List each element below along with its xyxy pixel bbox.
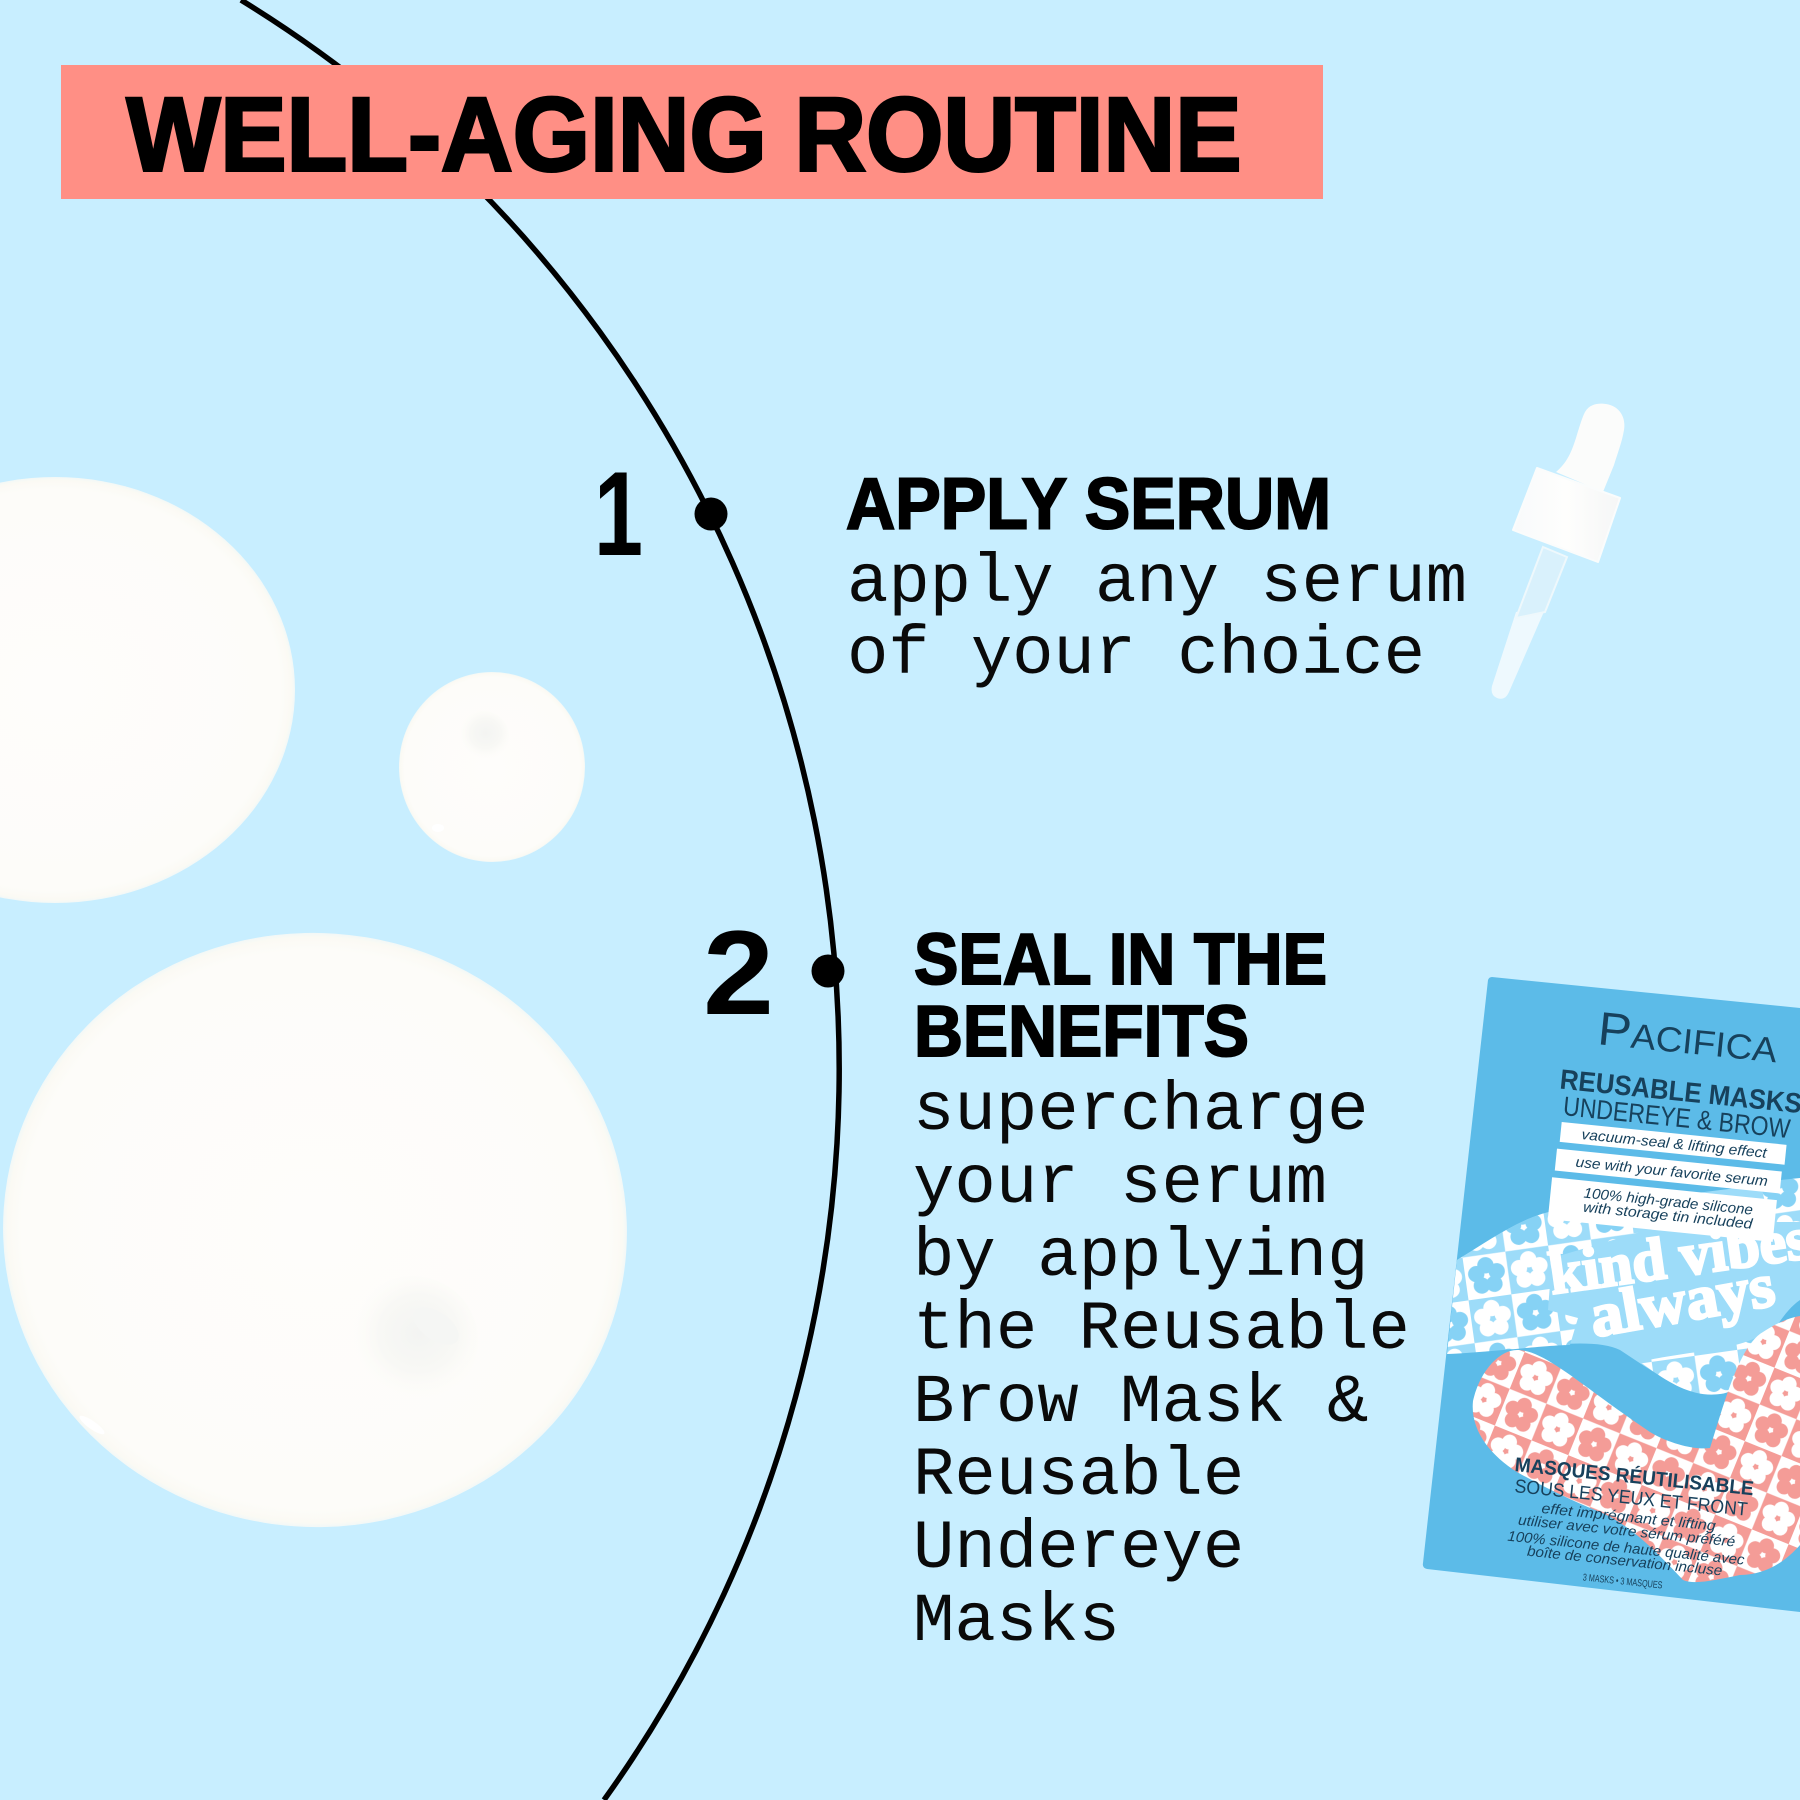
package text: PACIFICA — [1596, 1001, 1781, 1072]
timeline arc — [241, 0, 839, 1800]
package text: MASQUES RÉUTILISABLE — [1514, 1453, 1755, 1500]
step 1 body text — [847, 544, 1467, 694]
step 1 dot — [694, 498, 728, 530]
kind vibes always lettering: always — [1585, 1252, 1780, 1351]
package text: with storage tin included — [1582, 1200, 1754, 1233]
claim strip 2 — [1555, 1149, 1782, 1193]
step 2 number: 2 — [703, 906, 774, 1040]
package text: 100% high-grade silicone — [1583, 1186, 1754, 1219]
step 2 heading — [914, 920, 1327, 1072]
step 2 body text: by applying — [913, 1218, 1368, 1296]
pink floral undereye mask — [1473, 1316, 1800, 1582]
package text: 3 MASKS • 3 MASQUES — [1582, 1572, 1663, 1592]
claim strip 3 — [1548, 1177, 1777, 1242]
serum blobs — [0, 477, 647, 1548]
step 1 number: 1 — [594, 447, 643, 581]
step 2 body text: Reusable — [913, 1437, 1244, 1515]
package text: utiliser avec votre sérum préféré — [1517, 1513, 1736, 1551]
step 2 body text: supercharge — [913, 1072, 1368, 1150]
step 1 body text: apply any serum — [847, 544, 1467, 622]
step 2 body text: Undereye — [913, 1510, 1244, 1588]
icon: serum dropper — [1492, 404, 1624, 699]
blue floral band — [1447, 1178, 1800, 1395]
kind vibes always lettering — [1545, 1205, 1800, 1351]
step 2 body text: Brow Mask & — [913, 1364, 1368, 1442]
claim strip 1 — [1560, 1122, 1787, 1165]
step 2 heading: SEAL IN THE — [914, 920, 1327, 1000]
package text: boîte de conservation incluse — [1526, 1544, 1723, 1579]
step 2 body text: the Reusable — [913, 1291, 1410, 1369]
step 2 heading: BENEFITS — [914, 992, 1249, 1072]
step 2 body text: Masks — [913, 1583, 1120, 1661]
package body — [1423, 977, 1800, 1612]
blob: large with droplet — [0, 912, 647, 1548]
blob: small with droplet — [399, 672, 585, 862]
step 1 body text: of your choice — [847, 616, 1425, 694]
package text: vacuum-seal & lifting effect — [1581, 1127, 1768, 1162]
package text: 100% silicone de haute qualité avec — [1507, 1529, 1746, 1569]
package text: use with your favorite serum — [1575, 1155, 1769, 1190]
step 2 body text: your serum — [913, 1145, 1327, 1223]
product: reusable masks package — [1423, 977, 1800, 1612]
step 2 body text — [913, 1072, 1410, 1661]
package text: SOUS LES YEUX ET FRONT — [1514, 1476, 1749, 1521]
title banner: WELL-AGING ROUTINE — [126, 76, 1242, 194]
step 2 dot — [812, 954, 844, 988]
package text — [1504, 997, 1800, 1601]
blob: top left — [0, 477, 295, 903]
step 1 heading: APPLY SERUM — [846, 464, 1331, 544]
package text: effet imprégnant et lifting — [1541, 1501, 1716, 1535]
